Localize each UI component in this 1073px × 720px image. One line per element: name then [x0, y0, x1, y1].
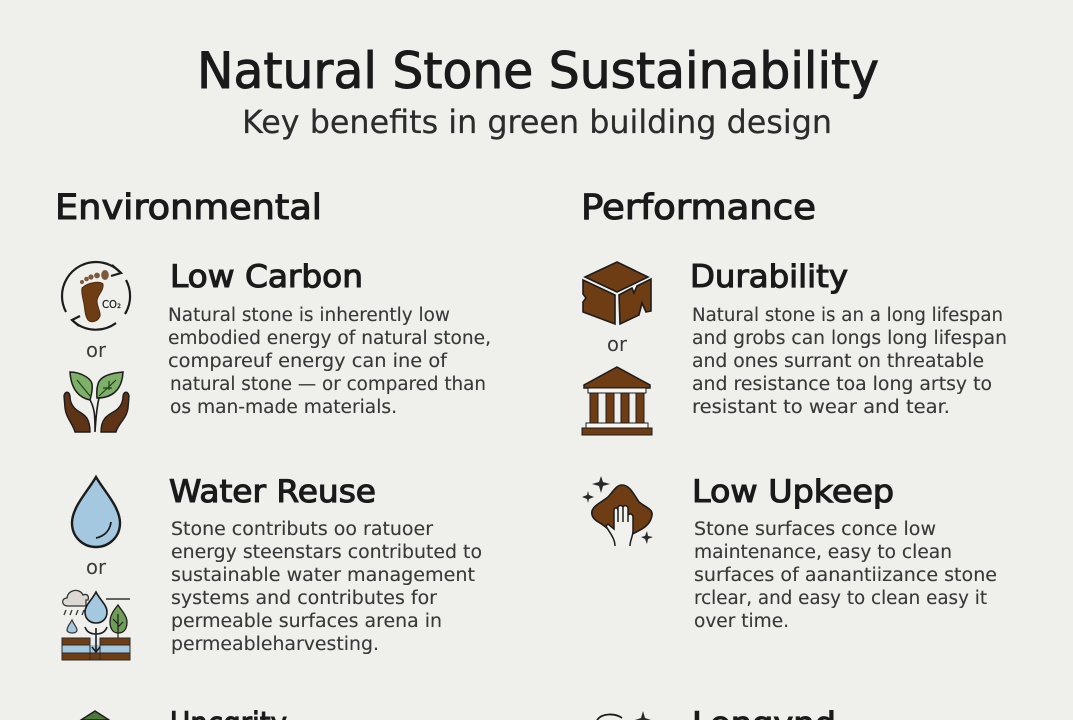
text: Low Carbon body: Natural stone is inherently low [168, 305, 450, 326]
text: Durability body: and ones surrant on threatable [692, 351, 984, 372]
heading: Low Upkeep: Low Upkeep [692, 474, 894, 510]
card: Durability [690, 259, 1007, 418]
text: or: or [86, 338, 107, 362]
title: Natural Stone Sustainability [197, 42, 879, 100]
text: Low Carbon body: embodied energy of natural stone, [168, 328, 491, 349]
heading: Low Carbon: Low Carbon [170, 259, 363, 295]
card: Low Upkeep [692, 474, 997, 632]
text: Low Carbon body: os man-made materials. [170, 397, 397, 418]
text: Water Reuse body: permeableharvesting. [171, 634, 379, 655]
text: Water Reuse body: sustainable water management [171, 565, 475, 586]
text: or: or [86, 555, 107, 579]
text: Water Reuse body: permeable surfaces arena in [171, 611, 442, 632]
text: Durability body [692, 305, 1007, 418]
text: Water Reuse body: energy steenstars contributed to [171, 542, 482, 563]
icon: plant in hands [64, 372, 129, 432]
text: Low Upkeep body: surfaces of aanantiizance stone [694, 565, 997, 586]
text: Low Upkeep body [694, 519, 997, 632]
heading: Water Reuse: Water Reuse [169, 474, 376, 510]
icon: carbon footprint cycle [62, 262, 130, 330]
card: Low Carbon [168, 259, 491, 418]
heading: Environmental: Environmental [55, 188, 322, 228]
text: Water Reuse body: Stone contributs oo ratuoer [171, 519, 433, 540]
text: Durability body: Natural stone is an a long lifespan [692, 305, 1003, 326]
text: Durability body: resistant to wear and tear. [692, 397, 950, 418]
text: Water Reuse body [171, 519, 482, 655]
icon: water drop [72, 477, 120, 547]
icon: clipped green roof [81, 711, 109, 720]
text: Water Reuse body: systems and contributes for [171, 588, 437, 609]
text: Durability body: and resistance toa long artsy to [692, 374, 992, 395]
text: Low Carbon body [168, 305, 491, 418]
icon: clipped circle with star [597, 711, 651, 720]
text: Low Upkeep body: rclear, and easy to clean easy it [694, 588, 987, 609]
heading: Durability: Durability [690, 259, 848, 295]
card: Water Reuse [169, 474, 482, 655]
text: Durability body: and grobs can longs long lifespan [692, 328, 1007, 349]
text: Low Upkeep body: Stone surfaces conce low [694, 519, 936, 540]
icon: water cycle through permeable ground [62, 590, 130, 660]
heading: Performance: Performance [581, 188, 816, 228]
text: Low Carbon body: natural stone — or compared than [170, 374, 486, 395]
text: Low Upkeep body: maintenance, easy to clean [694, 542, 952, 563]
text: Low Carbon body: compareuf energy can ine of [168, 351, 447, 372]
icon: carbon footprint cycle: CO₂ [102, 298, 121, 311]
subtitle: Key benefits in green building design [242, 103, 832, 141]
text: Low Upkeep body: over time. [694, 611, 789, 632]
icon: stone cube [583, 262, 651, 324]
icon: cleaning hand with sparkles [582, 476, 653, 546]
icon: classical temple [582, 367, 652, 435]
text: or: or [607, 332, 628, 356]
